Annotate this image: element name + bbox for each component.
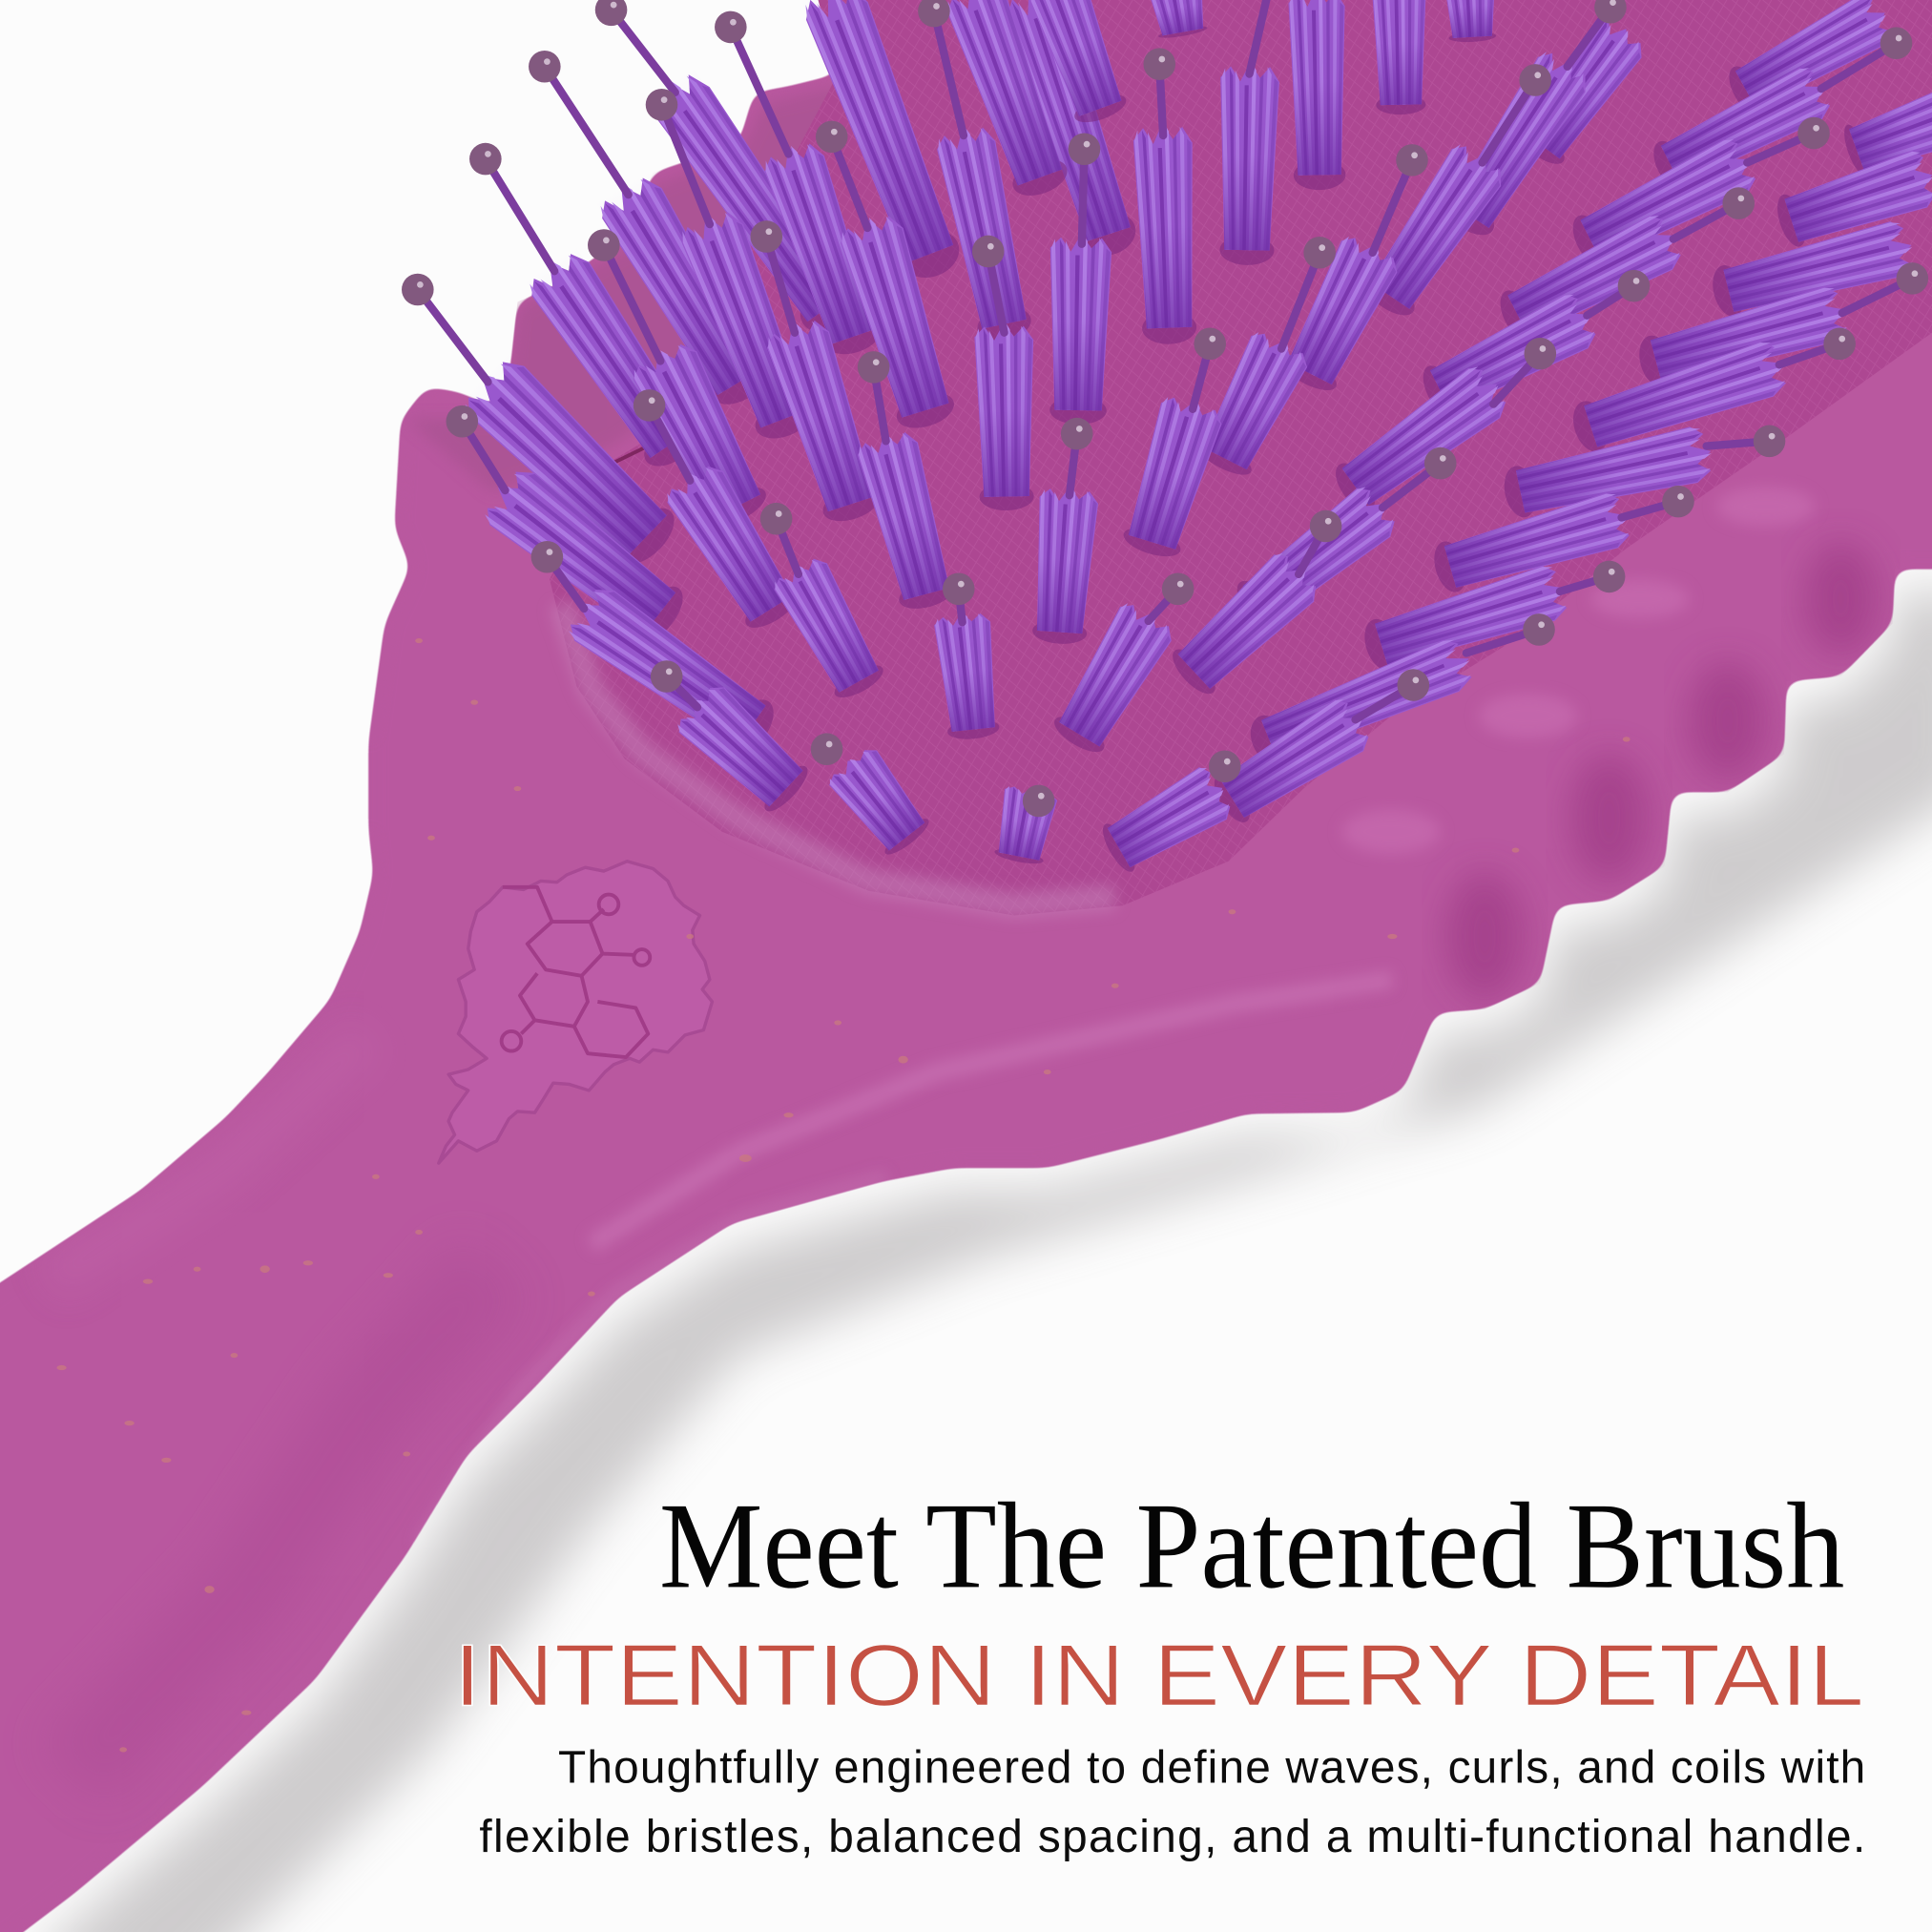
molecule structure: [502, 887, 650, 1057]
embossed molecule logo: [439, 862, 712, 1163]
bristles: middle rows: [634, 351, 1341, 759]
logo outline: [439, 862, 712, 1163]
bristles: right outer row: [1206, 85, 1932, 830]
description: [479, 1743, 1865, 1862]
bristles: right upper diagonal rows: [1118, 0, 1912, 635]
subtitle: INTENTION IN EVERY DETAIL: [453, 1627, 1864, 1724]
brush shadow: [24, 592, 1932, 1932]
handle speckles: [56, 638, 1631, 1752]
head rim lobes: [406, 86, 1878, 1001]
bristles: front left rows: [402, 274, 1240, 878]
description: flexible bristles, balanced spacing, and a multi-functional handle.: [479, 1812, 1865, 1862]
bristle pad: [550, 0, 1932, 916]
handle shading: [50, 431, 1392, 1775]
description: Thoughtfully engineered to define waves, curls, and coils with: [558, 1743, 1865, 1794]
title: Meet The Patented Brush: [659, 1477, 1844, 1613]
bristles: back rows: [469, 0, 1498, 534]
